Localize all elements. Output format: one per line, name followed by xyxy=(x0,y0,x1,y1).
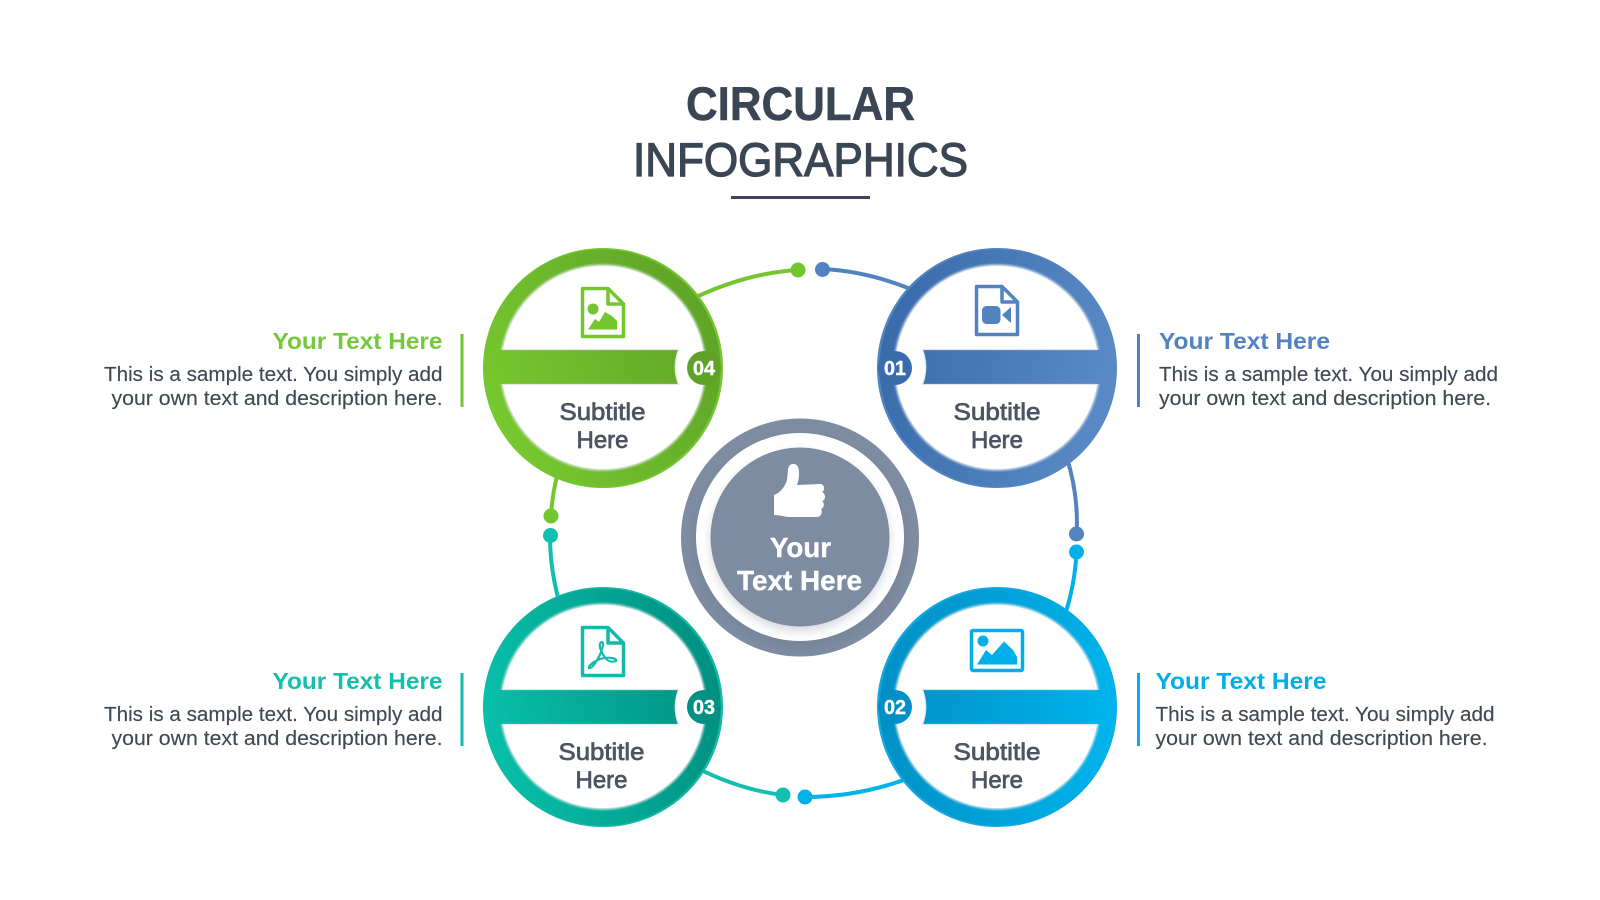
connector: teal left xyxy=(543,528,560,605)
icon: thumbs up xyxy=(774,464,825,517)
badge 03: 03 xyxy=(693,697,715,719)
connector arcs xyxy=(543,262,1084,804)
icon: pdf file xyxy=(582,628,624,676)
connector: green top xyxy=(690,262,806,300)
text block: bottom left teal: This is a sample text. You simply add xyxy=(104,703,442,726)
panel: center circle xyxy=(681,418,919,656)
connector: blue right xyxy=(1066,455,1084,542)
badge 01: 01 xyxy=(884,358,906,380)
title xyxy=(633,77,968,199)
panel: circle 01 blue xyxy=(877,248,1117,488)
text block: top right blue: Your Text Here xyxy=(1159,328,1330,354)
subtitle: Here xyxy=(576,427,628,454)
subtitle xyxy=(954,399,1040,454)
badge 01 xyxy=(878,351,912,385)
badge 02: 02 xyxy=(884,697,906,719)
panel: circle 02 cyan xyxy=(877,587,1117,827)
text block: bottom left teal xyxy=(104,668,464,750)
center text: Text Here xyxy=(737,565,862,596)
band xyxy=(923,350,1105,384)
subtitle: Here xyxy=(971,767,1023,794)
text block: bottom left teal: Your Text Here xyxy=(272,668,442,694)
text block: top right blue: This is a sample text. You simply add xyxy=(1159,363,1498,386)
icon: image file xyxy=(582,288,624,336)
panel: circle 03 teal xyxy=(483,587,723,827)
badge 02 xyxy=(878,690,912,724)
connector: blue top xyxy=(815,262,920,293)
band xyxy=(495,350,678,384)
text block: top left green: Your Text Here xyxy=(272,328,442,354)
center text xyxy=(737,532,862,596)
connector: green left xyxy=(544,472,558,524)
text block: top left green: your own text and description here. xyxy=(112,387,442,410)
subtitle xyxy=(954,739,1040,794)
connector: cyan bottom xyxy=(798,777,912,804)
icon: picture xyxy=(972,630,1022,670)
band xyxy=(495,690,678,724)
title: CIRCULAR xyxy=(686,77,915,130)
icon: video file xyxy=(976,286,1018,334)
subtitle: Here xyxy=(576,767,628,794)
subtitle: Subtitle xyxy=(560,399,646,426)
connector: teal bottom xyxy=(695,767,790,802)
text block: bottom right cyan: your own text and description here. xyxy=(1156,727,1488,750)
center text: Your xyxy=(770,532,831,563)
subtitle: Subtitle xyxy=(558,739,644,766)
band xyxy=(923,690,1105,724)
badge 03 xyxy=(687,690,721,724)
title: INFOGRAPHICS xyxy=(633,133,968,186)
subtitle: Subtitle xyxy=(954,399,1040,426)
text block: bottom right cyan xyxy=(1137,668,1494,750)
panel: circle 04 green xyxy=(483,248,723,488)
subtitle xyxy=(560,399,646,454)
text block: top right blue xyxy=(1137,328,1498,410)
badge 04 xyxy=(687,351,721,385)
subtitle: Here xyxy=(971,427,1023,454)
text block: top left green xyxy=(104,328,464,410)
subtitle xyxy=(558,739,644,794)
text block: top left green: This is a sample text. You simply add xyxy=(104,363,442,386)
badge 04: 04 xyxy=(693,358,716,380)
text block: bottom right cyan: Your Text Here xyxy=(1156,668,1326,694)
text block: top right blue: your own text and description here. xyxy=(1159,387,1491,410)
text block: bottom right cyan: This is a sample text. You simply add xyxy=(1156,703,1494,726)
connector: cyan right xyxy=(1064,544,1084,618)
text block: bottom left teal: your own text and description here. xyxy=(112,727,442,750)
subtitle: Subtitle xyxy=(954,739,1040,766)
